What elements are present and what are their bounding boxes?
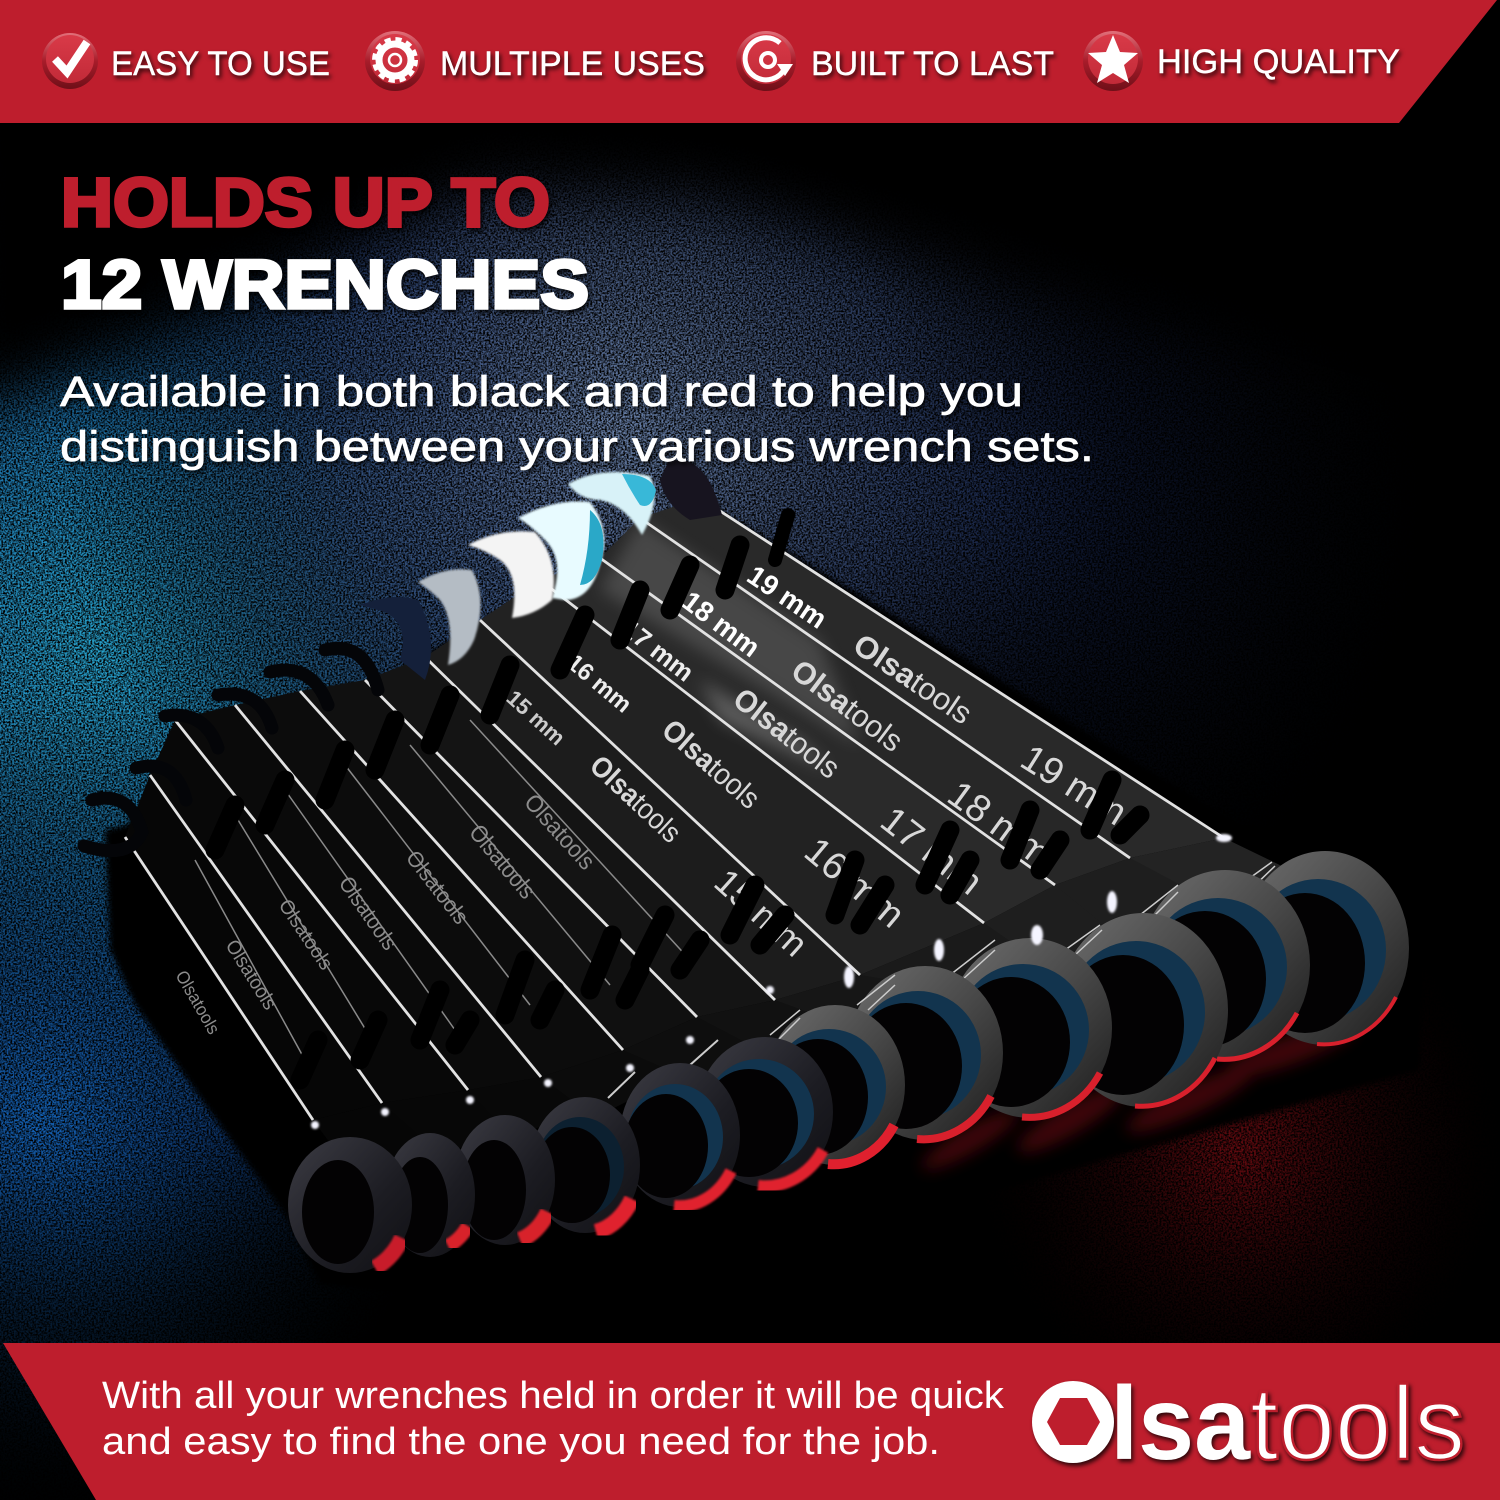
wrench size and brand markings: 18 mm <box>676 585 766 663</box>
ring: 9 mm <box>385 1133 475 1257</box>
wrench size and brand markings: 16 mm <box>796 830 912 937</box>
label: high quality: HIGH QUALITY <box>1157 43 1400 81</box>
ring: 12 mm <box>608 1063 740 1207</box>
wrench size and brand markings: Olsatools <box>519 789 600 875</box>
heading: HOLDS UP TO <box>61 164 550 241</box>
ring ends of wrenches <box>288 834 1409 1273</box>
logo: Olsatools <box>1032 1366 1465 1482</box>
wrench size and brand markings: Olsatools <box>785 653 910 759</box>
ring: 13 mm <box>690 1037 833 1187</box>
icon: star <box>1083 31 1143 91</box>
heading <box>61 164 589 323</box>
footer text <box>102 1375 1005 1463</box>
icon: check mark <box>42 33 98 89</box>
description text: distinguish between your various wrench sets. <box>60 423 1094 471</box>
wrench size and brand markings: 17 mm <box>616 613 700 687</box>
wrench size and brand markings: 15 mm <box>502 685 570 750</box>
ring: 17 mm <box>1058 913 1228 1107</box>
wrench size and brand markings: 16 mm <box>561 649 637 718</box>
wrench size and brand markings: Olsatools <box>655 713 766 816</box>
wrench size and brand markings: Olsatools <box>847 627 979 731</box>
wrench size and brand markings: 18 mm <box>940 773 1058 876</box>
description text: Available in both black and red to help you <box>60 368 1023 416</box>
wrench size and brand markings <box>172 559 1134 1038</box>
ring: 10 mm <box>455 1115 555 1245</box>
icon: circular arrow with gear <box>736 31 796 91</box>
icon: gear <box>365 31 425 91</box>
wrench size and brand markings: 19 mm <box>742 559 833 635</box>
ring: 14 mm <box>765 1005 905 1165</box>
footer text: With all your wrenches held in order it will be quick <box>102 1375 1005 1417</box>
wrench shanks <box>125 498 1224 1120</box>
wrench size and brand markings: Olsatools <box>274 895 337 974</box>
red glow under rings <box>916 1013 1361 1178</box>
logo: Olsatools: tools <box>1250 1366 1465 1482</box>
wrench holder teeth <box>215 515 1140 1090</box>
wrench size and brand markings: 19 mm <box>1013 737 1134 834</box>
wrench size and brand markings: Olsatools <box>221 936 281 1014</box>
open ends: bright lit heads <box>84 460 722 851</box>
neck sparkles <box>311 834 1232 1129</box>
wrench size and brand markings: Olsatools <box>172 967 224 1038</box>
ring: 19 mm <box>1240 851 1409 1045</box>
label: easy to use: EASY TO USE <box>111 45 330 83</box>
wrench size and brand markings: Olsatools <box>583 750 687 850</box>
label: multiple uses: MULTIPLE USES <box>440 45 705 83</box>
wrench edge highlights <box>125 498 1224 1120</box>
ring: 8 mm <box>288 1137 412 1273</box>
wrench necks joining rings <box>313 838 1290 1170</box>
wrench size and brand markings: 17 mm <box>872 799 990 904</box>
ring: 15 mm <box>847 966 1003 1140</box>
wrench size and brand markings: Olsatools <box>401 846 474 929</box>
ring: 11 mm <box>530 1097 640 1233</box>
black shadow under wrench set <box>105 498 1425 1295</box>
heading: 12 WRENCHES <box>61 246 589 323</box>
footer text: and easy to find the one you need for the job. <box>102 1421 940 1463</box>
wrench size and brand markings: Olsatools <box>463 820 541 904</box>
label: built to last: BUILT TO LAST <box>811 45 1054 83</box>
ring: 16 mm <box>948 938 1112 1118</box>
wrench size and brand markings: Olsatools <box>727 681 847 785</box>
ring: 18 mm <box>1140 870 1310 1060</box>
top banner <box>0 0 1497 123</box>
wrench set photograph <box>84 460 1425 1295</box>
wrench size and brand markings: 15 mm <box>707 860 816 965</box>
bottom banner <box>3 1343 1500 1500</box>
wrench size and brand markings: Olsatools <box>334 872 403 955</box>
logo: Olsatools: Olsa <box>1032 1366 1251 1482</box>
description text <box>60 368 1094 471</box>
